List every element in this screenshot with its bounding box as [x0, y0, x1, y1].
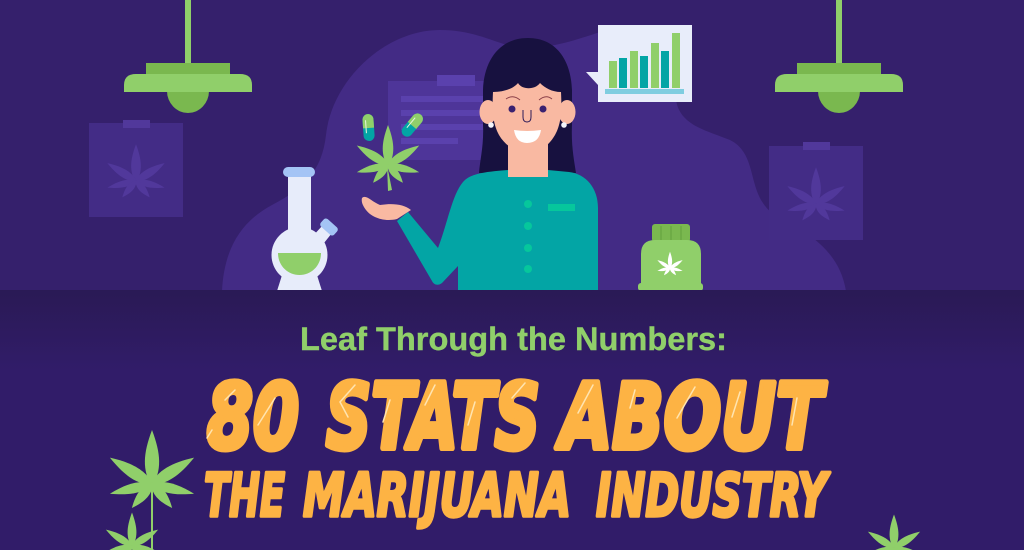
earrings: [488, 122, 494, 128]
lamp: right: [775, 0, 903, 113]
ears: [480, 100, 496, 124]
title line 1: ABOUT: [555, 365, 827, 470]
jar: [638, 224, 703, 291]
buttons: [524, 200, 532, 208]
clipboard: right with leaf: [769, 142, 863, 240]
title line 2: INDUSTRY: [596, 461, 831, 531]
hand: [362, 197, 411, 220]
lower panel with fading band: [0, 290, 1024, 550]
speech bubble chart: [586, 25, 692, 102]
pocket label: [548, 204, 575, 211]
icon: pill left: [362, 114, 375, 141]
clipboard: behind the person: [388, 75, 488, 160]
neck: [508, 140, 548, 180]
title line 1: [207, 365, 827, 470]
nose: [523, 110, 531, 122]
sweater: [397, 170, 598, 291]
title line 1: STATS: [326, 365, 540, 470]
face: [493, 83, 561, 153]
subtitle: Leaf Through the Numbers:: [300, 321, 727, 357]
lamp: left: [124, 0, 252, 113]
eyebrows: [506, 97, 552, 100]
icon: pill right: [399, 111, 425, 139]
clipboard: left with leaf: [89, 120, 183, 217]
eyes: [508, 106, 516, 112]
icon: white leaf: [656, 252, 684, 276]
letter highlights: [207, 383, 797, 438]
title line 2: MARIJUANA: [303, 461, 571, 531]
leaf: floating above hand: [354, 125, 422, 191]
title line 2: THE: [204, 461, 285, 531]
icon: faded leaf: [785, 167, 847, 222]
background blob: [222, 30, 846, 291]
leaf: bottom left small: [104, 513, 160, 550]
leaf: bottom right: [866, 515, 922, 550]
bong: [272, 167, 339, 291]
smile: [514, 130, 541, 143]
title line 1: 80: [207, 365, 299, 470]
icon: faded leaf: [105, 144, 167, 199]
person: [362, 38, 598, 291]
title line 2: [204, 461, 831, 531]
hair: [479, 38, 576, 173]
counter band: [0, 290, 1024, 370]
bar chart: [605, 33, 684, 94]
leaf: bottom left large: [107, 430, 197, 550]
